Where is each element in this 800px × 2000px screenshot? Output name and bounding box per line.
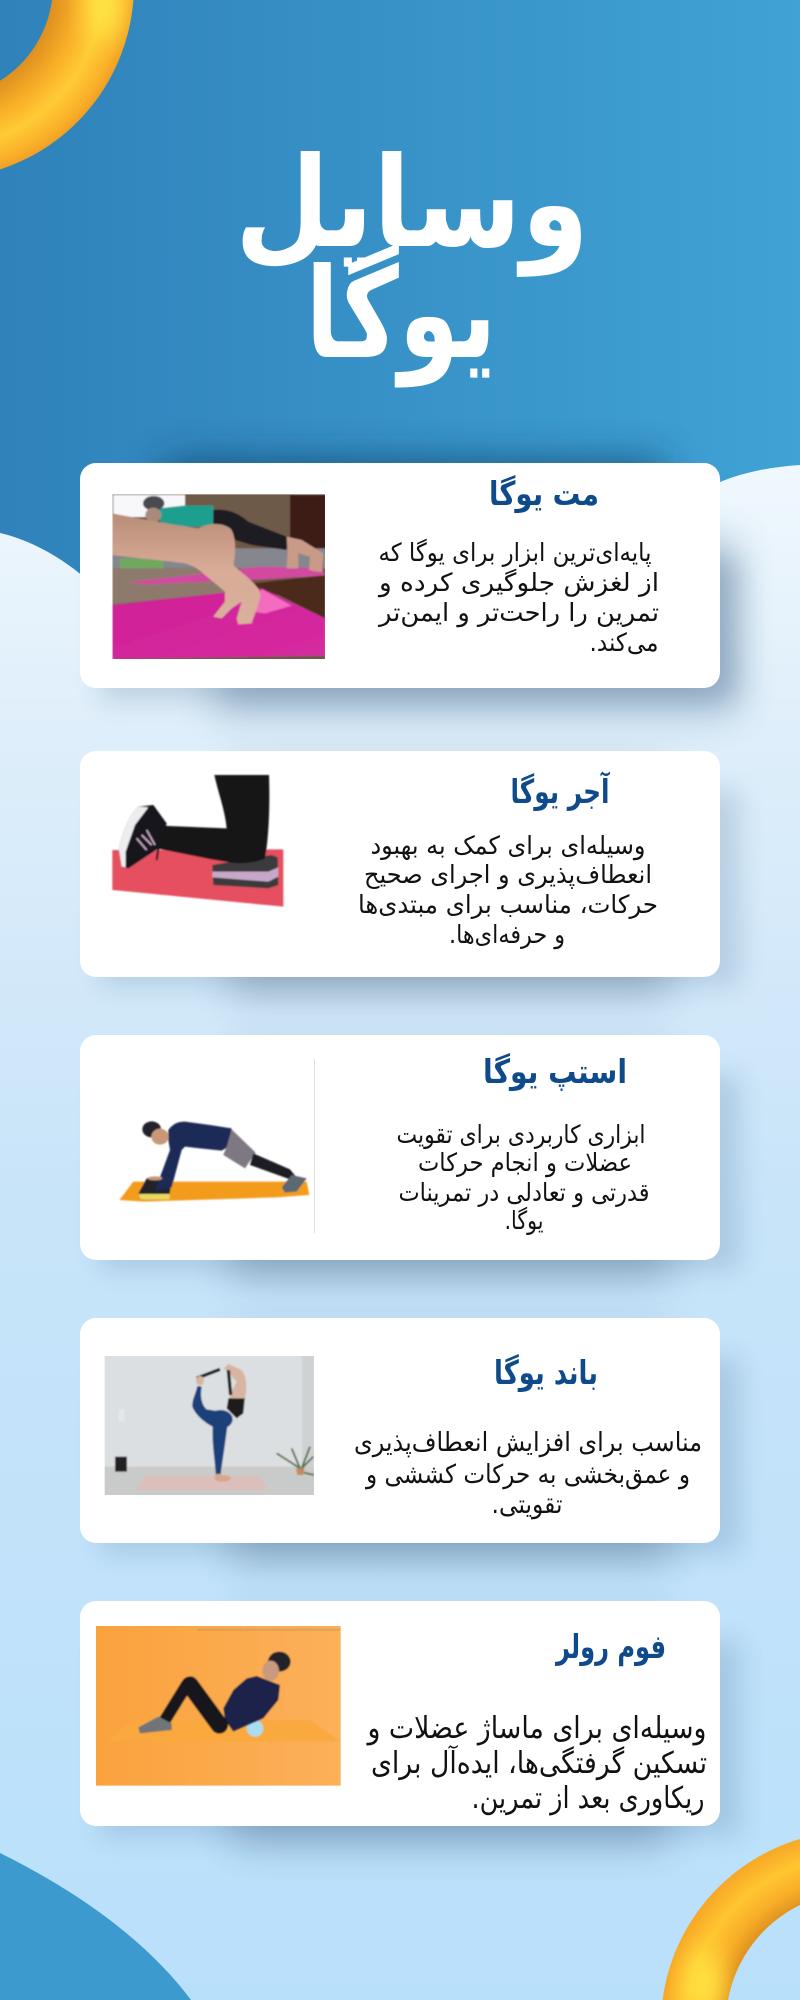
description text: قدرتی و تعادلی در تمرینات [398,1178,650,1208]
description text [358,831,658,950]
description text: می‌کند. [590,628,658,657]
description text: ریکاوری بعد از تمرین. [472,1781,704,1816]
description text: عضلات و انجام حرکات [418,1148,632,1178]
panel: yoga band [80,1318,740,1563]
decoration: bottom-right yellow ring [663,1839,800,2000]
description text [354,1428,702,1520]
photo: man planking on step [119,1121,309,1202]
description text: تقویتی. [492,1490,562,1520]
panel: yoga step [80,1035,740,1280]
panel: yoga block [80,751,740,996]
heading: باند یوگا [494,1353,598,1393]
photo: foot on pink mat [112,492,327,661]
description text: پایه‌ای‌ترین ابزار برای یوگا که [378,538,652,567]
heading: استپ یوگا [483,1052,627,1092]
panel: yoga mat [80,462,740,712]
description text: و حرفه‌ای‌ها. [449,920,565,950]
title: وسایل [235,131,589,277]
description text: تمرین را راحت‌تر و ایمن‌تر [377,598,659,628]
description text: وسیله‌ای برای کمک به بهبود [370,831,646,861]
background: blue top wave [0,0,800,640]
description text [366,1711,707,1816]
photo: man on foam roller [93,1623,343,1788]
description text: تسکین گرفتگی‌ها، ایده‌آل برای [371,1745,707,1781]
description text: از لغزش جلوگیری کرده و [377,568,659,598]
heading: مت یوگا [489,474,599,514]
decoration: top-left yellow ring [0,0,133,170]
description text: وسیله‌ای برای ماساژ عضلات و [366,1711,706,1746]
photo: woman stretching with band [103,1355,315,1496]
description text: انعطاف‌پذیری و اجرای صحیح [364,860,652,890]
description text [396,1120,650,1235]
decoration: bottom-left blue circle [0,1853,191,2000]
panel: foam roller [80,1601,740,1846]
divider line in photo [314,1059,315,1233]
title [235,131,589,388]
heading: آجر یوگا [510,771,610,812]
description text: حرکات، مناسب برای مبتدی‌ها [358,890,658,919]
description text: و عمق‌بخشی به حرکات کششی و [364,1460,690,1490]
title: یوگا [306,242,496,388]
photo: knee on yoga block [112,775,283,907]
description text [377,538,659,657]
description text: مناسب برای افزایش انعطاف‌پذیری [354,1428,702,1458]
heading: فوم رولر [555,1627,666,1667]
description text: یوگا. [504,1206,544,1235]
description text: ابزاری کاربردی برای تقویت [396,1120,646,1149]
